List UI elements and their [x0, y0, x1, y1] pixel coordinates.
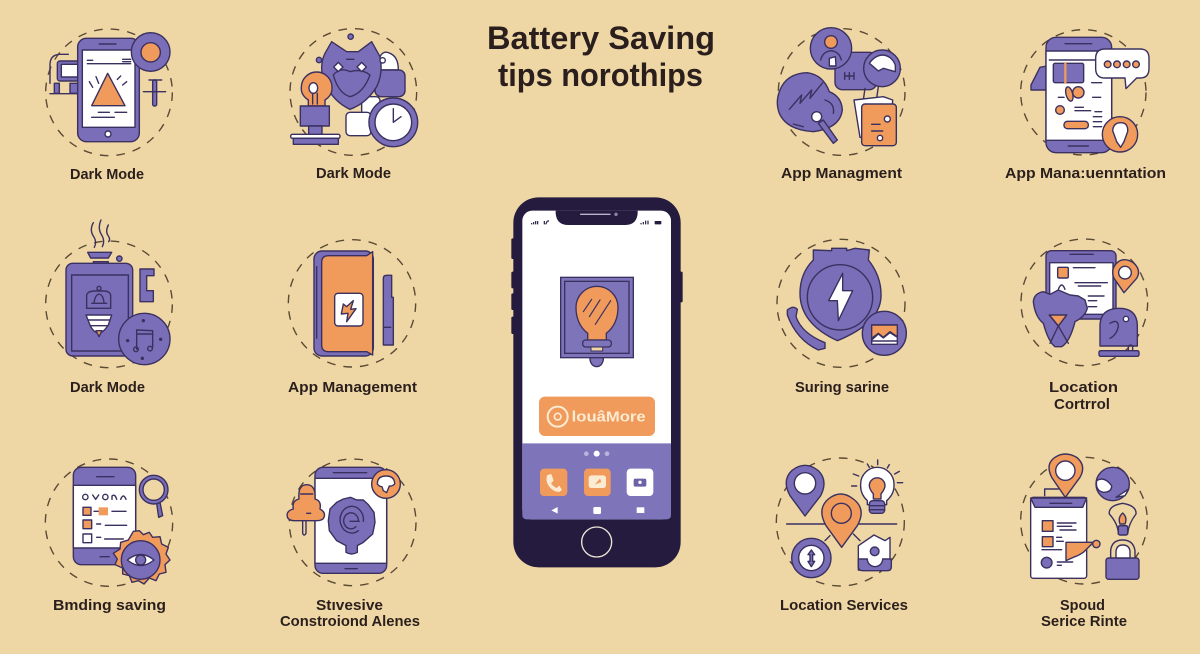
label: App Management: App Management — [288, 379, 417, 396]
panel: Location Services tip — [776, 458, 908, 614]
title — [487, 20, 715, 93]
panel: central phone — [511, 197, 683, 567]
label: Dark Mode: Dark Mode — [316, 165, 391, 182]
app icon: camera — [627, 469, 653, 496]
phone body — [511, 197, 683, 567]
icon: phone with chat bubble — [1021, 30, 1149, 155]
icon: cloud, profile, gauge and folder — [777, 28, 905, 155]
label: Location Control — [1049, 379, 1118, 413]
panel: Suring sarine tip — [777, 239, 906, 396]
icon: shield, bulb and clock — [290, 29, 418, 155]
label: Location Services: Location Services — [780, 597, 908, 614]
label: Spoud Serice Rinte: Serice Rinte — [1041, 613, 1127, 630]
button: load more: louâMore — [572, 409, 646, 425]
label: Stivesive Constroiond Alenes — [280, 597, 420, 630]
panel: Dark Mode phone tip — [46, 29, 172, 183]
icon: pins, bulb, compass and house — [776, 458, 904, 586]
icon: clipboard, pin, globe, bulb and padlock — [1021, 454, 1147, 584]
panel: Location Control tip — [1021, 239, 1148, 413]
label: Stivesive Constroiond Alenes: Stıvesive — [316, 597, 383, 614]
panel: Bmding saving tip — [45, 459, 173, 614]
label: Dark Mode: Dark Mode — [70, 379, 145, 396]
label: Location Control: Location — [1049, 379, 1118, 396]
label: App Managment: App Managment — [781, 165, 902, 182]
panel: Dark Mode tablet and music tip — [46, 220, 172, 396]
button: load more — [539, 397, 655, 436]
icon: phone with gear bulb and cloud — [287, 459, 416, 586]
title: tips norothips — [498, 57, 703, 93]
icon: lightning shield — [777, 239, 906, 367]
label: Dark Mode: Dark Mode — [70, 166, 144, 183]
label: Stivesive Constroiond Alenes: Constroiond Alenes — [280, 613, 420, 630]
app icon: message — [584, 469, 611, 496]
icon: phone with warning triangle — [46, 29, 172, 156]
panel: Dark Mode bulb and clock tip — [290, 29, 418, 182]
title: Battery Saving — [487, 20, 715, 56]
icon: browser, pin and bell — [1021, 239, 1148, 366]
app icon: phone — [540, 469, 567, 496]
panel: Stivesive Constroiond Alenes tip — [280, 459, 420, 630]
icon: tablet with steam and music note — [46, 220, 172, 368]
panel: App Manaentation tip — [1005, 30, 1166, 182]
icon: orange phone with lightning tile — [288, 240, 416, 367]
panel: App Managment tip — [777, 28, 905, 182]
label: Spoud Serice Rinte: Spoud — [1060, 597, 1105, 614]
panel: Spoud Serice Rinte tip — [1021, 454, 1147, 630]
label: Spoud Serice Rinte — [1041, 597, 1127, 630]
icon: phone checklist with gear and magnifier — [45, 459, 173, 586]
label: Location Control: Cortrrol — [1054, 396, 1110, 413]
panel: App Management orange phone tip — [288, 240, 417, 396]
label: App Manaentation: App Mana:uenntation — [1005, 165, 1166, 182]
light bulb frame — [561, 277, 633, 367]
label: Suring sarine: Suring sarine — [795, 379, 889, 396]
label: Bmding saving: Bmding saving — [53, 597, 166, 614]
